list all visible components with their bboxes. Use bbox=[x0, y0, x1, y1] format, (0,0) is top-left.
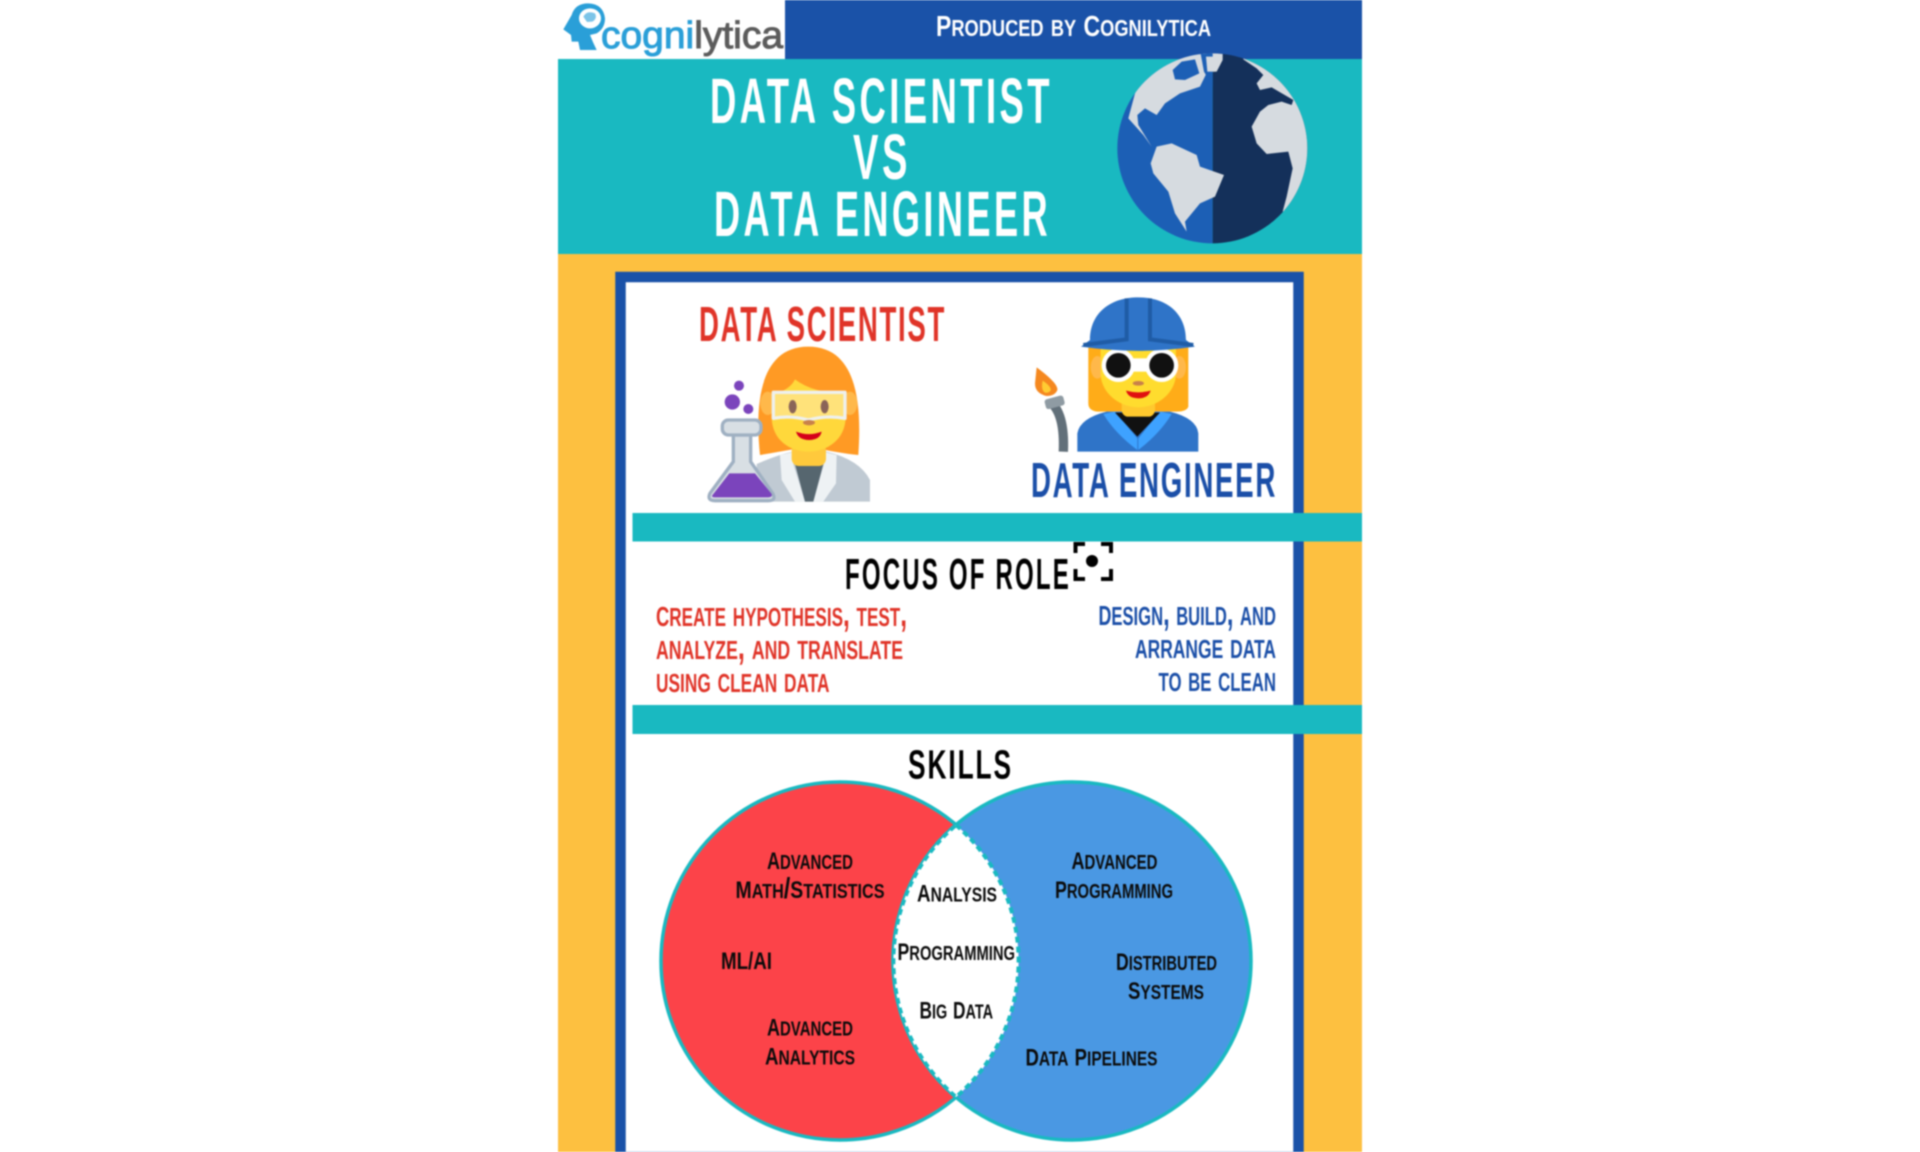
panel: title band bbox=[558, 59, 1362, 254]
text: data engineer focus bbox=[1098, 592, 1276, 699]
title: VS bbox=[853, 121, 911, 193]
text: data scientist focus: Create hypothesis, test, bbox=[656, 593, 907, 634]
labels: data engineer skills: Systems bbox=[1128, 974, 1204, 1006]
icon: woman scientist with flask bbox=[709, 347, 870, 502]
text: data engineer focus: Design, build, and bbox=[1098, 592, 1276, 633]
icon: woman engineer with torch bbox=[1035, 297, 1198, 452]
section bar: bottom bbox=[632, 705, 1362, 734]
labels: data scientist skills: ML/AI bbox=[721, 948, 772, 975]
overlap lens bbox=[893, 825, 1019, 1097]
chart: skills venn diagram bbox=[661, 782, 1251, 1140]
heading: skills: SKILLS bbox=[908, 742, 1013, 788]
header text: produced by: Produced by Cognilytica bbox=[936, 6, 1211, 43]
logo: cognilytica bbox=[558, 0, 785, 59]
labels: data engineer skills bbox=[1026, 844, 1217, 1072]
text: data scientist focus bbox=[656, 593, 907, 700]
title: DATA SCIENTIST bbox=[710, 65, 1053, 137]
circle: data scientist bbox=[661, 782, 1019, 1140]
header band bbox=[785, 0, 1362, 59]
text: data engineer focus: arrange data bbox=[1135, 625, 1276, 666]
labels: shared skills: Programming bbox=[898, 935, 1015, 967]
labels: data scientist skills: Advanced bbox=[767, 844, 853, 876]
labels: shared skills: Big Data bbox=[920, 994, 993, 1026]
title bbox=[710, 65, 1053, 250]
logo wordmark: cognilytica bbox=[601, 15, 784, 57]
panel: yellow background bbox=[558, 254, 1362, 1152]
section bar: top bbox=[632, 513, 1362, 542]
text: data scientist focus: analyze, and translate bbox=[656, 626, 903, 667]
labels: data engineer skills: Advanced bbox=[1072, 844, 1158, 876]
labels: data engineer skills: Programming bbox=[1055, 873, 1173, 905]
role heading: data engineer: DATA ENGINEER bbox=[1031, 454, 1277, 508]
labels: data engineer skills: Distributed bbox=[1116, 945, 1217, 977]
icon: focus target bbox=[1076, 544, 1111, 579]
labels: data scientist skills: Advanced bbox=[767, 1010, 853, 1042]
heading: focus of role: FOCUS OF ROLE bbox=[845, 550, 1071, 599]
icon: globe bbox=[1113, 50, 1313, 250]
icon: head with brain bbox=[563, 3, 605, 50]
panel: white content frame bbox=[620, 277, 1298, 1152]
labels: shared skills bbox=[898, 876, 1015, 1026]
labels: data engineer skills: Data Pipelines bbox=[1026, 1040, 1158, 1072]
labels: data scientist skills: Math/Statistics bbox=[736, 873, 884, 905]
circle: data engineer bbox=[893, 782, 1251, 1140]
role heading: data scientist: DATA SCIENTIST bbox=[699, 298, 946, 352]
title: DATA ENGINEER bbox=[714, 178, 1051, 250]
text: data scientist focus: using clean data bbox=[656, 659, 830, 700]
labels: shared skills: Analysis bbox=[917, 876, 997, 908]
text: data engineer focus: to be clean bbox=[1158, 658, 1276, 699]
labels: data scientist skills bbox=[721, 844, 884, 1072]
labels: data scientist skills: Analytics bbox=[765, 1040, 855, 1072]
